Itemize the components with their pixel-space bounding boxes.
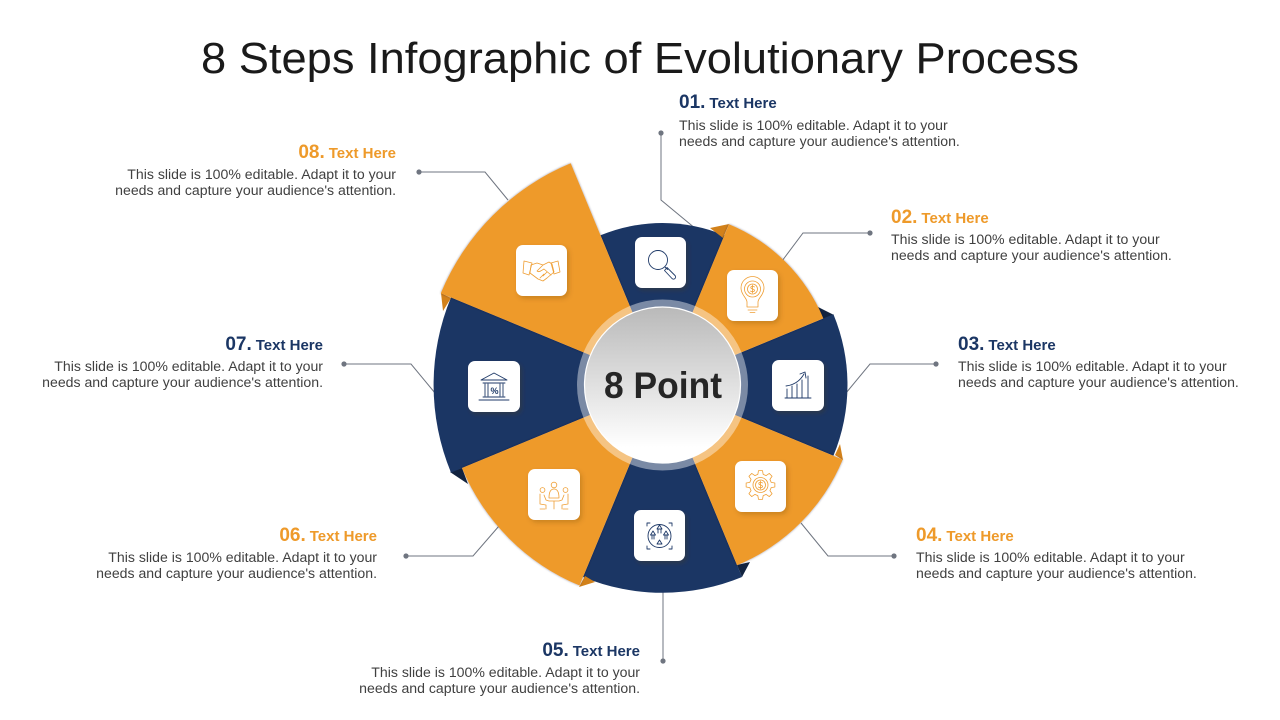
icon card: growth chart — [772, 360, 824, 411]
segment 4 orange — [662, 385, 843, 565]
step 07 description: This slide is 100% editable. Adapt it to your — [54, 358, 323, 374]
segment 7 navy — [434, 297, 662, 484]
step 02 text — [891, 207, 1172, 263]
step 05 description: This slide is 100% editable. Adapt it to your — [371, 664, 640, 680]
step 04 heading: 04. Text Here — [916, 525, 1014, 546]
segment 3 navy — [662, 307, 847, 456]
step 05 heading: 05. Text Here — [542, 640, 640, 661]
step 03 heading: 03. Text Here — [958, 334, 1056, 355]
step 06 description: This slide is 100% editable. Adapt it to your — [108, 549, 377, 565]
step 08 text — [115, 142, 396, 198]
segment 2 orange — [662, 224, 823, 385]
segment 8 orange — [441, 163, 662, 385]
icon card: bank percent: % — [490, 386, 499, 396]
centre ring — [577, 300, 748, 470]
leader line 06 — [403, 526, 499, 559]
step 01 description: This slide is 100% editable. Adapt it to your — [679, 117, 948, 133]
icon card: light bulb dollar — [727, 270, 778, 321]
leader line 05 — [660, 592, 666, 664]
step 03 description: This slide is 100% editable. Adapt it to your — [958, 358, 1227, 374]
step 07 heading: 07. Text Here — [225, 334, 323, 355]
spiral wheel — [434, 163, 847, 593]
step 04 text — [916, 525, 1197, 581]
leader line 02 — [782, 230, 873, 261]
step 07 description: needs and capture your audience's attention. — [42, 374, 323, 390]
leader line 07 — [341, 361, 435, 393]
step 05 description: needs and capture your audience's attention. — [359, 680, 640, 696]
icon card: gear dollar — [735, 461, 786, 512]
step 06 heading: 06. Text Here — [279, 525, 377, 546]
step 06 text — [96, 525, 377, 581]
segment 6 orange — [462, 385, 662, 587]
leader line 01 — [658, 130, 696, 229]
step 07 text — [42, 334, 323, 390]
step 05 text — [359, 640, 640, 696]
step 06 description: needs and capture your audience's attention. — [96, 565, 377, 581]
icon card: meeting people — [528, 469, 580, 520]
leader line 03 — [846, 361, 939, 393]
icon card: handshake — [516, 245, 567, 296]
icon card: bank percent — [468, 361, 520, 412]
centre disc — [584, 307, 740, 463]
leader line 04 — [801, 523, 897, 559]
step 01 text — [679, 92, 960, 149]
step 02 description: This slide is 100% editable. Adapt it to your — [891, 231, 1160, 247]
step 04 description: This slide is 100% editable. Adapt it to your — [916, 549, 1185, 565]
step 03 description: needs and capture your audience's attention. — [958, 374, 1239, 390]
step 04 description: needs and capture your audience's attention. — [916, 565, 1197, 581]
step 01 heading: 01. Text Here — [679, 92, 777, 113]
leader line 08 — [416, 169, 508, 200]
step 08 description: This slide is 100% editable. Adapt it to your — [127, 166, 396, 182]
icon card: magnifier — [635, 237, 686, 288]
segment 1 navy — [600, 223, 724, 385]
segment 5 navy — [583, 385, 750, 593]
step 02 description: needs and capture your audience's attention. — [891, 247, 1172, 263]
step 03 text — [958, 334, 1239, 390]
step 08 description: needs and capture your audience's attention. — [115, 182, 396, 198]
icon card: network globe — [634, 510, 685, 561]
step 01 description: needs and capture your audience's attention. — [679, 133, 960, 149]
step 02 heading: 02. Text Here — [891, 207, 989, 228]
title: 8 Steps Infographic of Evolutionary Process — [201, 34, 1079, 83]
centre label: 8 Point — [604, 365, 722, 406]
step 08 heading: 08. Text Here — [298, 142, 396, 163]
